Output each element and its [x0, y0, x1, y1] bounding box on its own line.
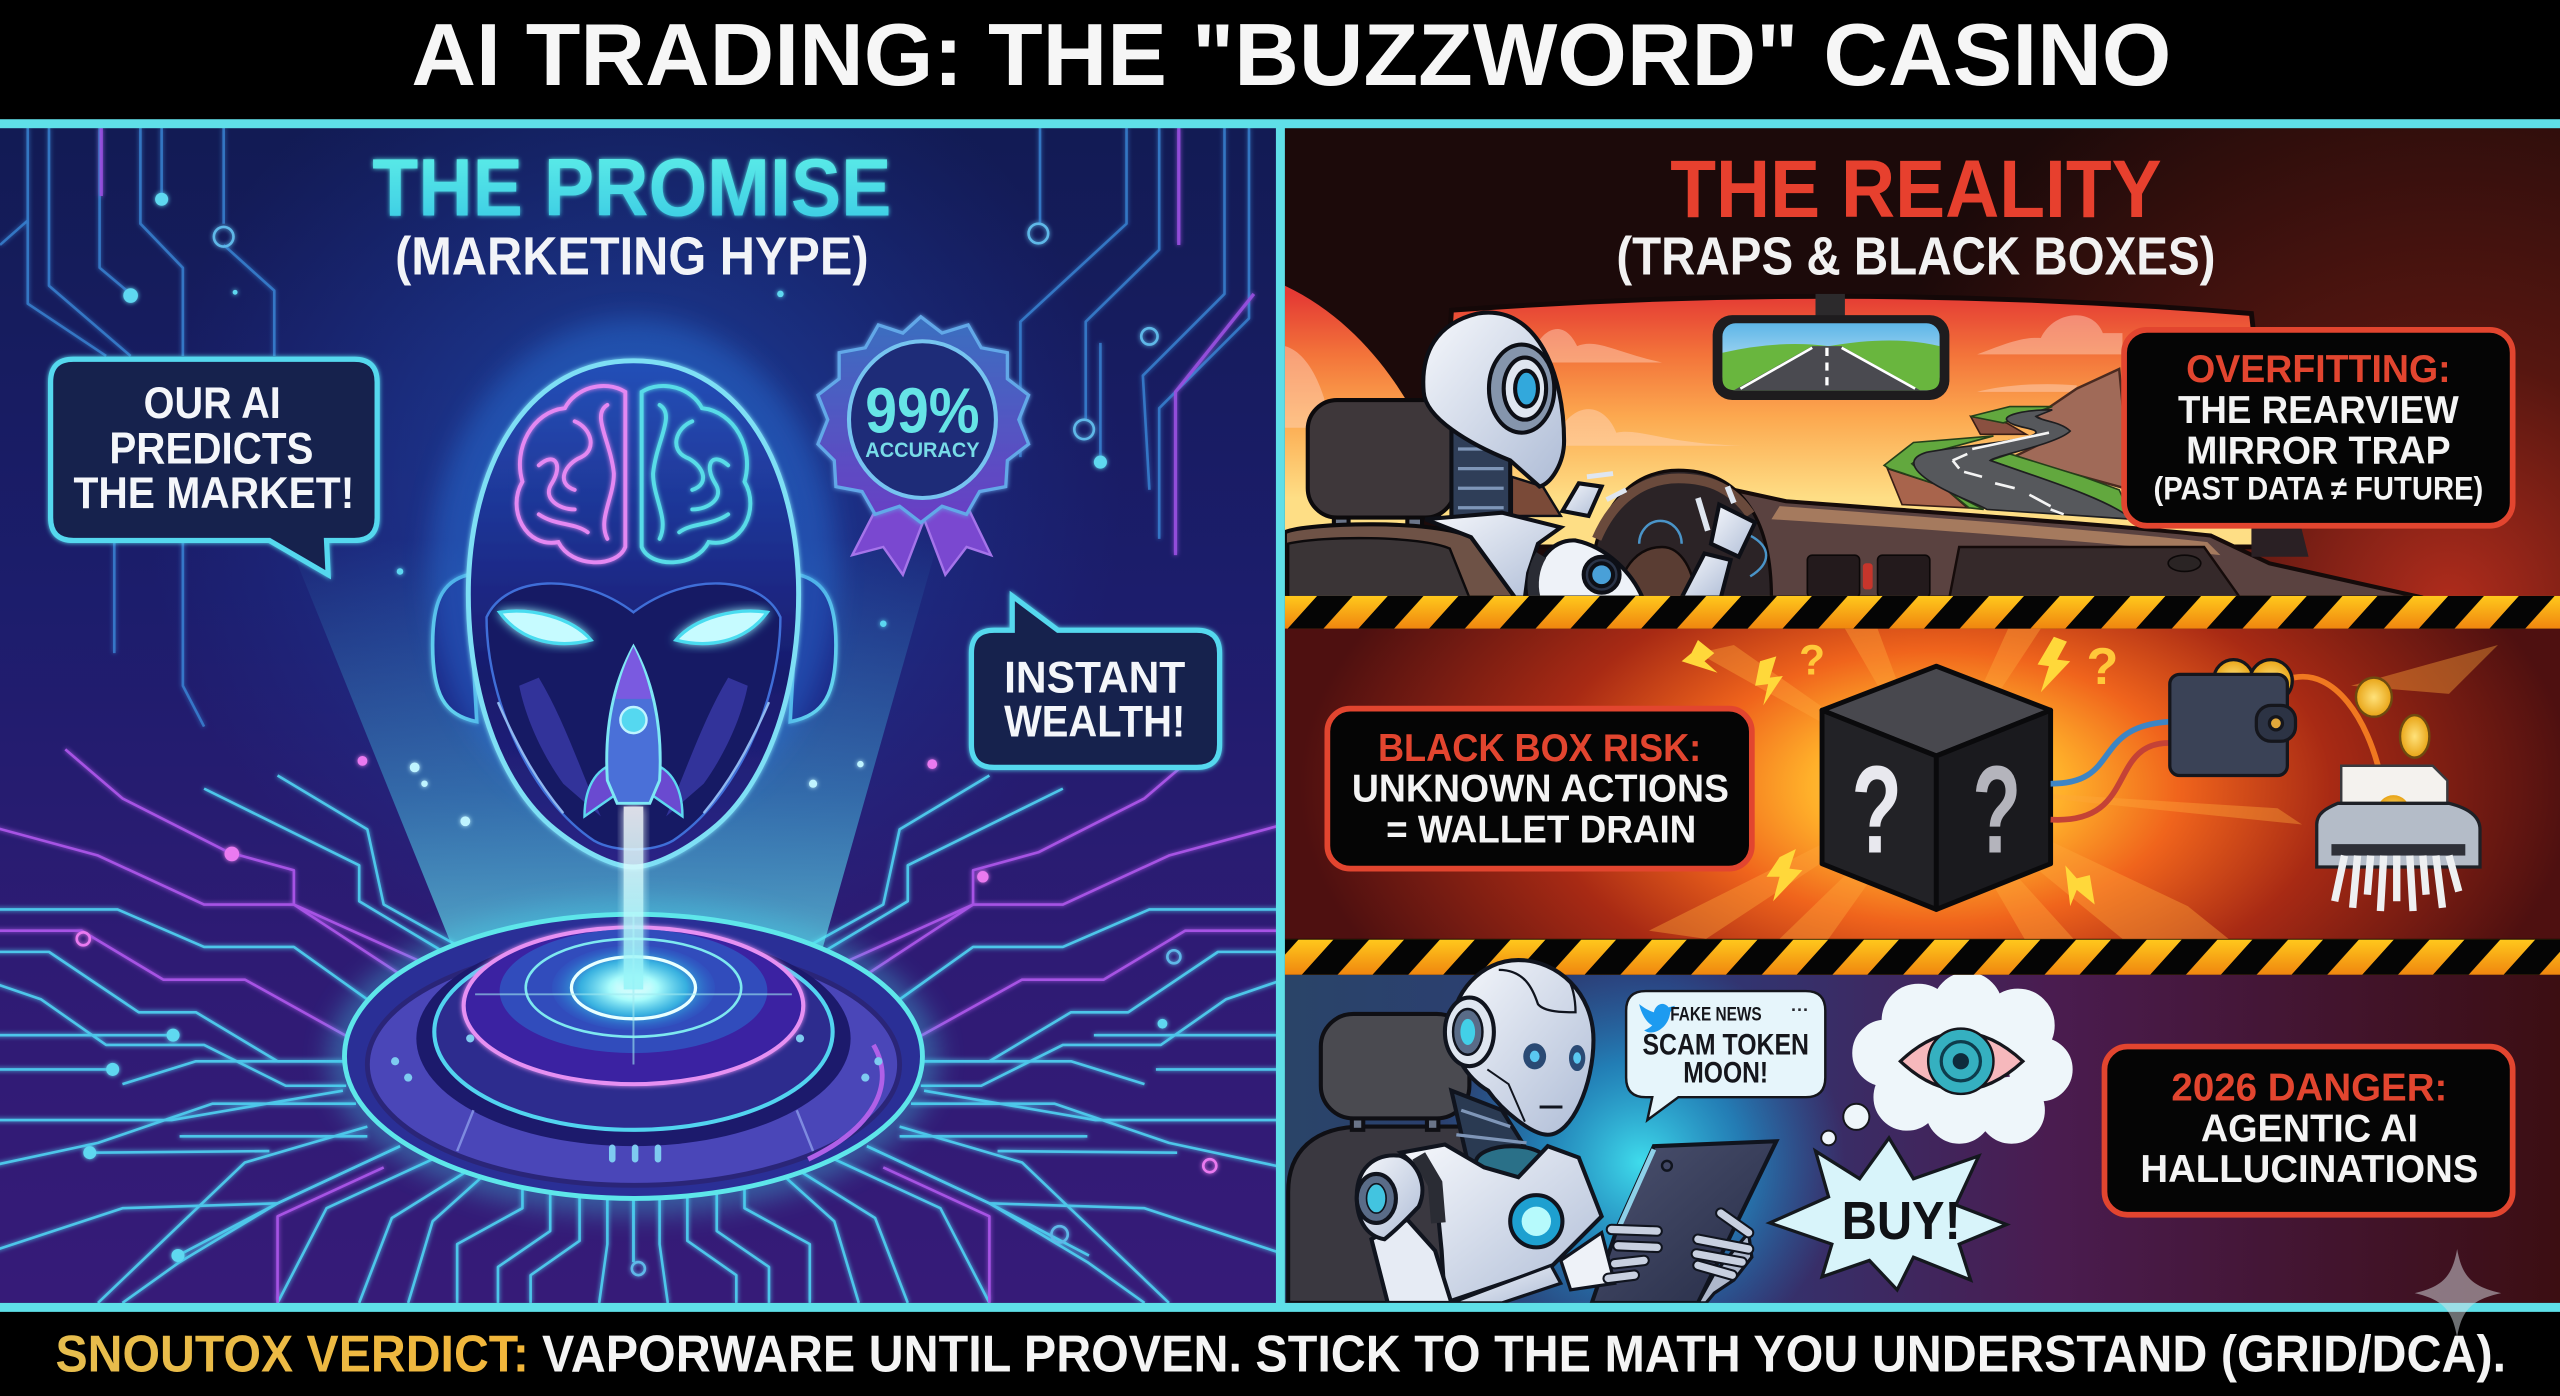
thought cloud with eye	[1821, 973, 2072, 1145]
brain	[517, 386, 750, 562]
callout: instant wealth: INSTANT	[1004, 653, 1185, 702]
hazard stripe: upper	[1285, 596, 2560, 629]
particles	[410, 761, 864, 826]
robot driver	[1423, 313, 1755, 598]
scene: agentic AI	[1285, 973, 2560, 1303]
question marks	[1799, 636, 2118, 696]
platform	[328, 901, 939, 1215]
face plate	[487, 583, 780, 849]
shredder	[2317, 766, 2480, 911]
subheading: marketing hype: (MARKETING HYPE)	[395, 226, 869, 286]
badge ribbon	[852, 498, 991, 575]
robot hands	[1451, 1213, 1752, 1303]
watermark sparkle	[2415, 1249, 2501, 1337]
fake news post bubble: SCAM TOKEN	[1642, 1029, 1809, 1062]
callout: overfitting: MIRROR TRAP	[2186, 430, 2451, 473]
fake news post bubble: MOON!	[1683, 1056, 1768, 1089]
black box cube: ?	[1972, 741, 2021, 879]
headset ears	[433, 575, 836, 722]
clouds	[1285, 315, 2122, 446]
callout: 2026 danger: 2026 DANGER:	[2171, 1066, 2447, 1109]
callout: our AI predicts the market	[51, 359, 377, 575]
callout: overfitting: OVERFITTING:	[2186, 348, 2451, 391]
callout: black box risk: BLACK BOX RISK:	[1378, 727, 1701, 770]
heading: the promise: THE PROMISE	[372, 143, 891, 234]
callout: black box risk: UNKNOWN ACTIONS	[1352, 768, 1729, 811]
icon: bird	[1639, 1004, 1675, 1032]
lightning bolts	[1682, 637, 2095, 906]
circuit traces	[0, 127, 1283, 1303]
scene: overfitting driver	[1285, 127, 2560, 598]
robot head: reader	[1445, 960, 1593, 1135]
rearview mirror	[1713, 294, 1949, 400]
falling coins and arrow	[2294, 677, 2429, 808]
robot torso and arm	[1357, 1091, 1602, 1303]
hazard stripe: lower	[1285, 940, 2560, 975]
wires	[2051, 722, 2170, 820]
callout: our AI predicts the market: THE MARKET!	[73, 469, 354, 518]
scene: black box risk	[1285, 629, 2560, 939]
callout: 2026 danger	[2104, 1047, 2513, 1215]
steering wheel	[1590, 470, 1771, 598]
buy burst	[1770, 1138, 2007, 1290]
footer verdict: SNOUTOX VERDICT:	[56, 1325, 529, 1383]
tablet	[1592, 1141, 1776, 1303]
subheading: traps and black boxes: (TRAPS & BLACK BOXES)	[1616, 226, 2216, 286]
callout: 2026 danger: AGENTIC AI	[2201, 1107, 2418, 1150]
buy burst: BUY!	[1842, 1191, 1961, 1251]
badge: 99% accuracy	[818, 317, 1029, 575]
panel: the promise	[0, 127, 1283, 1303]
dashboard	[1734, 490, 2423, 598]
badge: 99% accuracy: 99%	[865, 376, 980, 447]
light column	[624, 807, 643, 989]
fake news post bubble: ···	[1791, 1000, 1809, 1020]
windshield sky	[1437, 296, 2278, 547]
question marks: ?	[2087, 638, 2118, 696]
headrest and seat	[1285, 400, 1515, 598]
panel: the reality	[1285, 127, 2560, 1303]
callout: our AI predicts the market: OUR AI	[144, 379, 281, 428]
callout: overfitting	[2124, 330, 2513, 526]
badge: 99% accuracy: ACCURACY	[865, 439, 980, 462]
light beam	[287, 539, 939, 999]
callout: instant wealth: WEALTH!	[1004, 697, 1185, 746]
hologram AI head	[429, 318, 838, 989]
callout: black box risk: = WALLET DRAIN	[1386, 808, 1696, 851]
heading: the reality: THE REALITY	[1670, 144, 2162, 235]
fake news post bubble: FAKE NEWS	[1670, 1003, 1762, 1025]
wallet with coins	[2170, 660, 2296, 776]
callout: our AI predicts the market: PREDICTS	[109, 425, 313, 474]
cliff and road	[1884, 369, 2132, 519]
callout: overfitting: (PAST DATA ≠ FUTURE)	[2153, 470, 2483, 507]
rocket	[584, 647, 682, 816]
callout: black box risk	[1327, 709, 1752, 869]
burst rays	[1649, 629, 2498, 939]
callout: overfitting: THE REARVIEW	[2178, 389, 2459, 432]
callout: instant wealth	[971, 596, 1220, 767]
black box cube	[1822, 666, 2051, 909]
callout: 2026 danger: HALLUCINATIONS	[2140, 1148, 2478, 1191]
question marks: ?	[1799, 636, 1825, 683]
eyes	[500, 611, 767, 644]
fake news post bubble	[1626, 991, 1825, 1120]
black box cube: ?	[1851, 741, 1902, 879]
title: AI TRADING: THE "BUZZWORD" CASINO	[411, 5, 2171, 104]
seat	[1288, 1014, 1471, 1303]
